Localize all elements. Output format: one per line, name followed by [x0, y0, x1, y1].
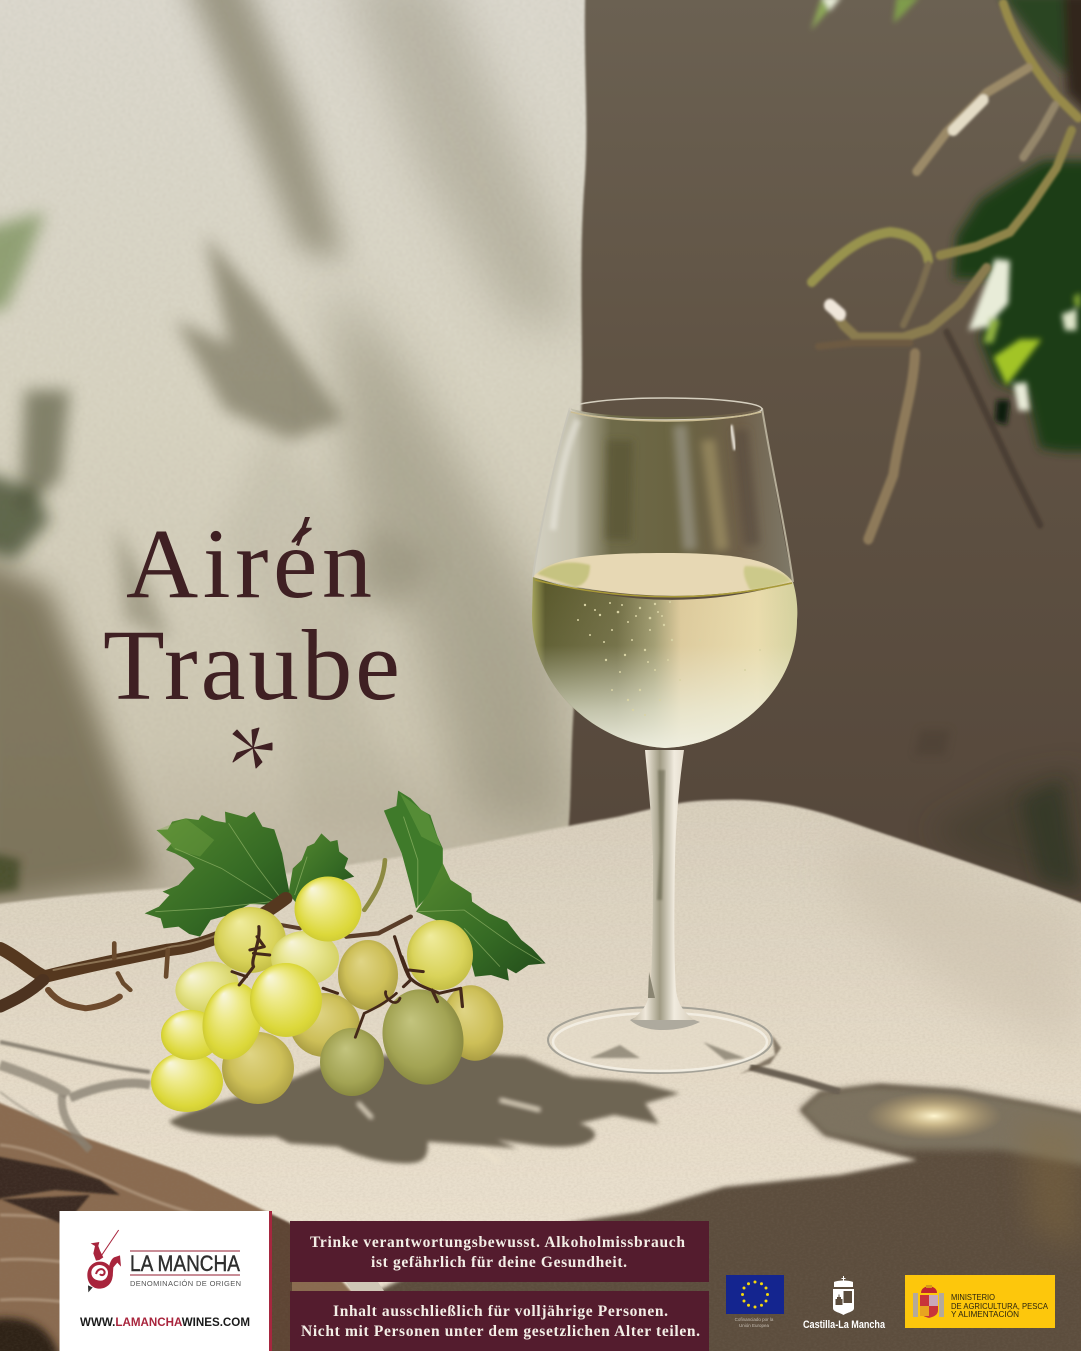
notice: responsible drinking: ist gefährlich für deine Gesundheit.	[371, 1254, 627, 1271]
grape bunch with vine branch and leaves	[0, 791, 546, 1112]
wooden table	[0, 1090, 420, 1351]
notice: responsible drinking: Trinke verantwortungsbewusst. Alkoholmissbrauch	[310, 1234, 685, 1251]
cloth fold shadows, left	[0, 1042, 150, 1150]
glass rim and outline	[533, 398, 793, 582]
background: right wall	[560, 0, 1081, 920]
notice: adults only: Nicht mit Personen unter dem gesetzlichen Alter teilen.	[301, 1323, 700, 1340]
notice: responsible drinking	[290, 1221, 709, 1282]
vine branch	[0, 860, 411, 1008]
front grapes	[250, 876, 473, 1037]
title: Airén Traube: Airén	[126, 508, 372, 619]
logo: European Union: Unión Europea	[739, 1323, 770, 1328]
glass stem	[632, 750, 694, 1020]
background: wall shading at bottom right	[915, 730, 1081, 890]
soft shading on far side of cloth	[850, 854, 1081, 1038]
logo: Spanish Ministry of Agriculture: Y ALIMENTACIÓN	[951, 1309, 1019, 1319]
vine tendrils and leaves, top right	[811, 0, 1081, 539]
linen tablecloth	[0, 790, 1081, 1351]
logo: Spanish Ministry of Agriculture	[905, 1275, 1055, 1328]
bubbles	[577, 601, 761, 716]
title: Airén Traube	[103, 508, 400, 721]
notice: adults only: Inhalt ausschließlich für volljährige Personen.	[333, 1303, 668, 1320]
icon: Spanish coat of arms	[913, 1285, 944, 1318]
website url: WWW.LAMANCHAWINES.COM	[80, 1317, 250, 1329]
panel: La Mancha logo	[60, 1211, 272, 1351]
icon: knight on horseback emblem	[87, 1230, 121, 1292]
dark shaded cloth, lower right	[380, 1084, 1081, 1351]
logo wordmark	[130, 1250, 241, 1288]
logo: Spanish Ministry of Agriculture: DE AGRICULTURA, PESCA	[951, 1301, 1048, 1311]
logo: European Union: Cofinanciado por la	[735, 1317, 774, 1322]
sun spot in glass shadow	[872, 1094, 996, 1138]
wine body	[532, 577, 797, 748]
dark grape stems	[232, 927, 462, 1037]
logo: Castilla-La Mancha: Castilla-La Mancha	[803, 1319, 886, 1331]
grape cluster shadow	[169, 1053, 680, 1163]
logo wordmark: DENOMINACIÓN DE ORIGEN	[130, 1279, 241, 1288]
vine leaves	[145, 791, 546, 981]
logo: Castilla-La Mancha	[803, 1276, 886, 1331]
logo wordmark: LA MANCHA	[130, 1251, 240, 1276]
wine glass	[532, 398, 797, 1074]
wine surface	[533, 553, 793, 596]
glass foot	[548, 1007, 781, 1074]
metal glint between notices	[346, 1282, 384, 1291]
logo: European Union	[726, 1275, 784, 1328]
notice: adults only	[290, 1291, 709, 1351]
logo: Spanish Ministry of Agriculture: MINISTERIO	[951, 1292, 995, 1302]
glass bowl above the wine	[533, 408, 793, 595]
title: Airén Traube: Traube	[103, 609, 400, 721]
back grapes	[151, 907, 509, 1112]
background: left plaster wall with leaf shadows	[0, 0, 600, 930]
icon: asterisk ornament	[233, 728, 272, 768]
